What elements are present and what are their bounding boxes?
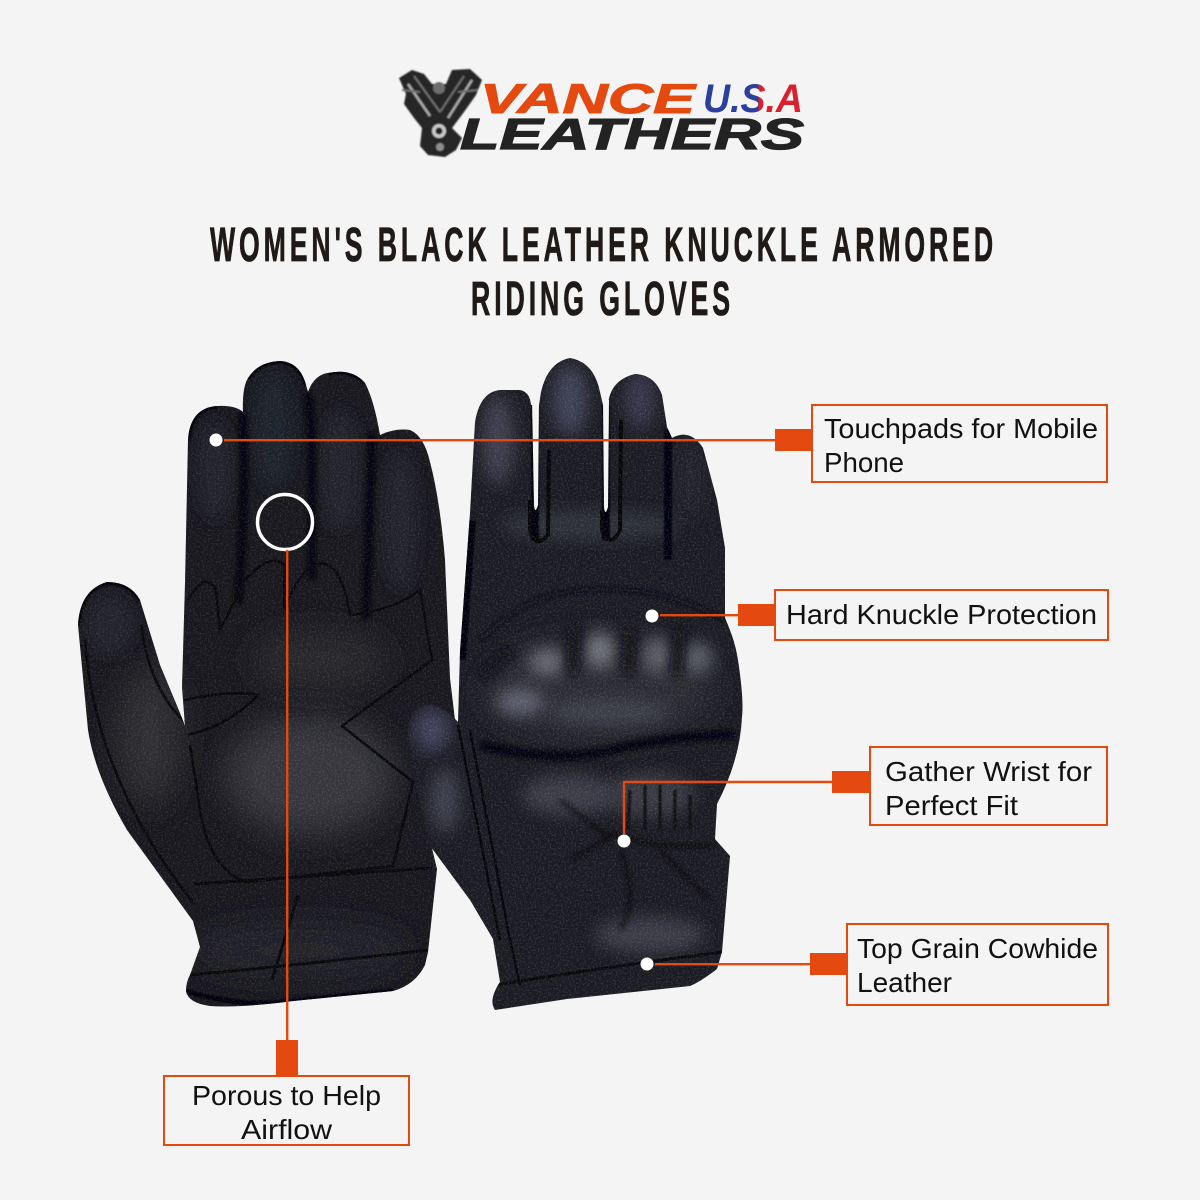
logo: Vance Leathers USA: [399, 69, 804, 159]
title: [210, 219, 997, 326]
leader line: [286, 550, 288, 1042]
knuckle highlights: [529, 648, 565, 676]
finger separations: [238, 392, 372, 620]
title: RIDING GLOVES: [471, 273, 734, 326]
connector block: [775, 429, 812, 451]
finger separations: [462, 405, 668, 660]
connector block: [738, 604, 775, 626]
finger gaps showing background: [532, 400, 609, 512]
label box: Touchpads for Mobile: [824, 413, 1098, 444]
label box: Phone: [824, 447, 904, 478]
marker dot: [646, 610, 658, 622]
callout: gather wrist for perfect fit: [618, 747, 1107, 848]
label box: Porous to Help: [192, 1080, 381, 1111]
right glove: back side with knuckle armor: [400, 350, 750, 1020]
callout: top grain cowhide leather: [640, 924, 1108, 1005]
palm stitching: [184, 561, 432, 882]
leader line: [660, 614, 740, 616]
gathered wrist: [522, 775, 618, 815]
icon: v-twin engine: [399, 69, 482, 157]
label box: [847, 924, 1108, 1005]
marker dot: [618, 834, 630, 848]
marker dot: [640, 958, 654, 970]
label box: [164, 1076, 409, 1145]
callout: hard knuckle protection: [646, 590, 1108, 640]
label box: [775, 590, 1108, 640]
knuckle dark folds: [480, 589, 725, 640]
logo word: U.S.A: U.S.A: [703, 77, 803, 121]
label box: Perfect Fit: [885, 790, 1018, 821]
label box: [870, 747, 1107, 825]
left glove: palm side: [70, 350, 470, 1020]
marker dot: [210, 434, 222, 446]
label box: Gather Wrist for: [885, 756, 1092, 787]
connector block: [276, 1040, 298, 1076]
connector block: [810, 953, 847, 975]
callout: touchpads for mobile phone: [210, 405, 1107, 482]
logo word: LEATHERS: LEATHERS: [460, 110, 804, 159]
label box: [812, 405, 1107, 482]
marker ring: [258, 494, 312, 550]
label box: Top Grain Cowhide: [857, 933, 1098, 964]
logo word: VANCE: VANCE: [480, 75, 698, 122]
label box: Leather: [857, 967, 952, 998]
label box: Airflow: [241, 1114, 333, 1145]
leader line: [224, 439, 776, 441]
connector block: [832, 771, 870, 793]
leader line: [624, 782, 834, 834]
label box: Hard Knuckle Protection: [786, 599, 1097, 630]
leader line: [655, 963, 812, 965]
callout: porous to help airflow: [164, 494, 409, 1145]
